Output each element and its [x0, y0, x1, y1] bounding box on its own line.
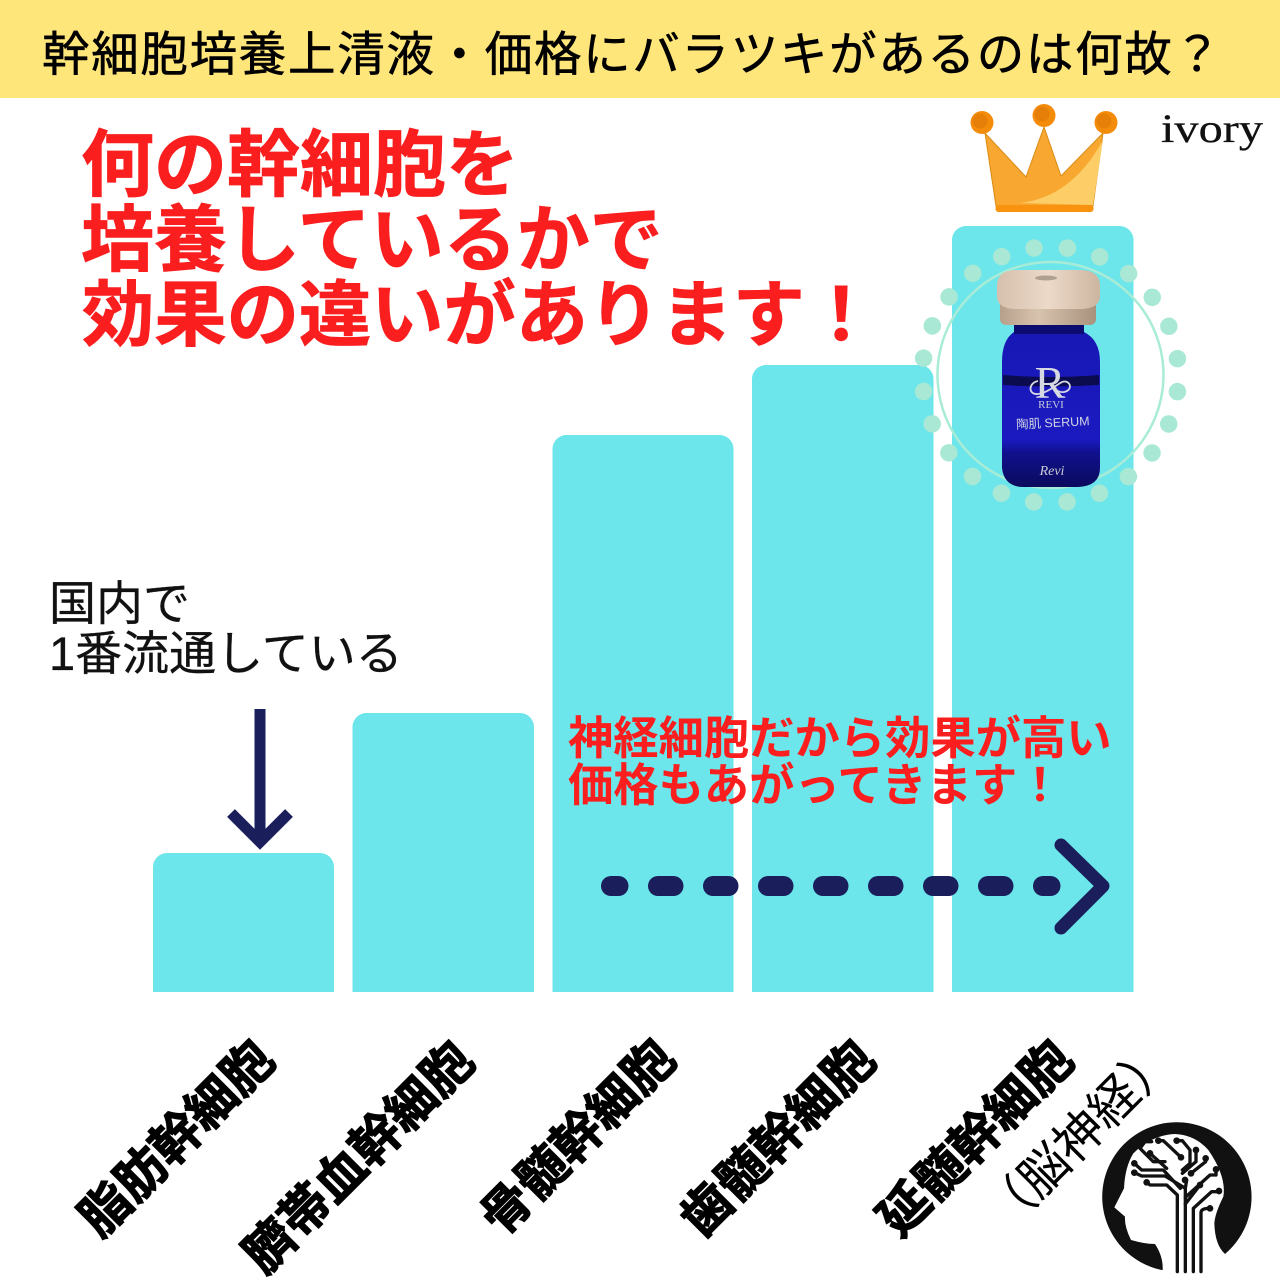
- label: 延髄幹細胞: 延髄幹細胞: [868, 1031, 1084, 1247]
- bar: 延髄幹細胞: [952, 226, 1134, 992]
- product: blue serum bottle: REVI: [1038, 399, 1064, 411]
- header band: [0, 0, 1280, 98]
- icon: circuit brain head: [1102, 1122, 1252, 1272]
- product: blue serum bottle: 陶肌 SERUM: [1016, 414, 1090, 432]
- label: 歯髄幹細胞: 歯髄幹細胞: [670, 1031, 886, 1247]
- main heading: 効果の違いがあります！: [82, 276, 877, 356]
- main heading: 培養しているかで: [81, 200, 663, 281]
- product: blue serum bottle: R: [1035, 357, 1066, 408]
- product: blue serum bottle: Revi: [1039, 464, 1065, 479]
- main heading: 何の幹細胞を: [81, 125, 519, 206]
- icon: crown: [970, 104, 1118, 212]
- label: 脂肪幹細胞: 脂肪幹細胞: [69, 1031, 285, 1247]
- note: domestic market: 1番流通している: [49, 627, 403, 680]
- product badge: dotted ring: [922, 247, 1178, 503]
- callout: price rises with effect: [568, 713, 1112, 811]
- label: 骨髄幹細胞: 骨髄幹細胞: [470, 1030, 686, 1246]
- title: 幹細胞培養上清液・価格にバラツキがあるのは何故？: [42, 29, 1221, 82]
- note: domestic market: 国内で: [49, 577, 190, 630]
- axis labels: [69, 1030, 1185, 1280]
- product: blue serum bottle: [997, 270, 1100, 487]
- bar chart: [153, 226, 1134, 992]
- label: 脳神経: （脳神経）: [974, 1031, 1185, 1242]
- bar: 臍帯血幹細胞: [352, 713, 534, 992]
- brand name: ivory: ivory: [1161, 106, 1263, 151]
- bar: 脂肪幹細胞: [153, 853, 334, 992]
- note: domestic market: [49, 577, 403, 680]
- bar: 歯髄幹細胞: [752, 365, 934, 992]
- label: 臍帯血幹細胞: 臍帯血幹細胞: [233, 1032, 485, 1280]
- arrow: down to first bar: [231, 709, 289, 842]
- callout: price rises with effect: 神経細胞だから効果が高い: [568, 713, 1112, 764]
- main heading: [81, 125, 877, 356]
- arrow: dashed to the right: [611, 845, 1103, 928]
- bar: 骨髄幹細胞: [552, 435, 734, 992]
- callout: price rises with effect: 価格もあがってきます！: [568, 760, 1063, 811]
